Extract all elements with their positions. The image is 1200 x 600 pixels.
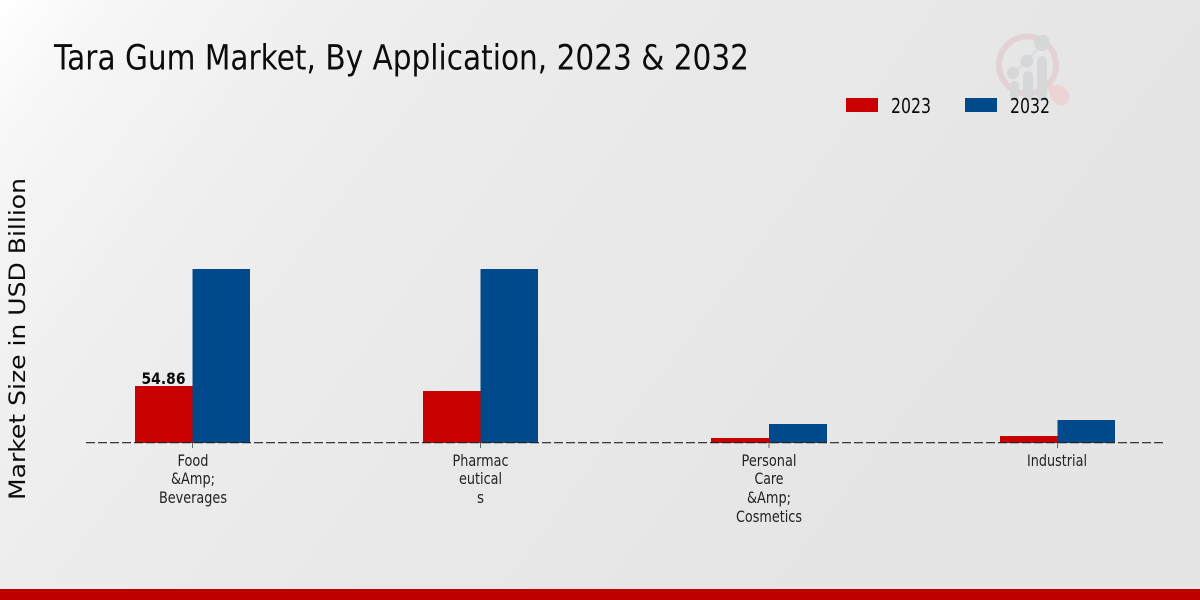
group: Industrial <box>1000 420 1115 443</box>
group: Food & Beverages <box>135 269 250 443</box>
bar chart <box>86 269 1164 448</box>
category label: Personal Care & Cosmetics: Care <box>754 469 784 488</box>
title: Tara Gum Market, By Application, 2023 & 2032 <box>53 38 749 78</box>
legend item: 2032 <box>965 94 1050 118</box>
legend item: 2032: 2032 <box>1010 94 1050 118</box>
y axis label: Market Size in USD Billion <box>5 178 31 500</box>
category label: Industrial: Industrial <box>1027 451 1087 470</box>
category label: Personal Care & Cosmetics <box>736 451 802 526</box>
data label: 54.86 <box>142 369 186 388</box>
legend item: 2023 <box>846 94 931 118</box>
category label: Pharmaceuticals: eutical <box>459 469 502 488</box>
category label: Pharmaceuticals <box>452 451 508 507</box>
category label: Personal Care & Cosmetics: Cosmetics <box>736 507 802 526</box>
legend <box>846 94 1050 118</box>
footer bar <box>0 589 1200 600</box>
category label: Personal Care & Cosmetics: Personal <box>742 451 796 470</box>
category label: Food & Beverages <box>159 451 227 507</box>
group: Personal Care & Cosmetics <box>711 424 827 443</box>
watermark logo <box>999 35 1061 101</box>
legend item: 2023: 2023 <box>891 94 931 118</box>
category label: Food & Beverages: Food <box>178 451 208 470</box>
category label: Food & Beverages: Beverages <box>159 488 227 507</box>
group: Pharmaceuticals <box>423 269 538 443</box>
category label: Pharmaceuticals: Pharmac <box>452 451 508 470</box>
category label: Personal Care & Cosmetics: &Amp; <box>747 488 791 507</box>
category label: Food & Beverages: &Amp; <box>171 469 215 488</box>
category label: Pharmaceuticals: s <box>477 488 484 507</box>
